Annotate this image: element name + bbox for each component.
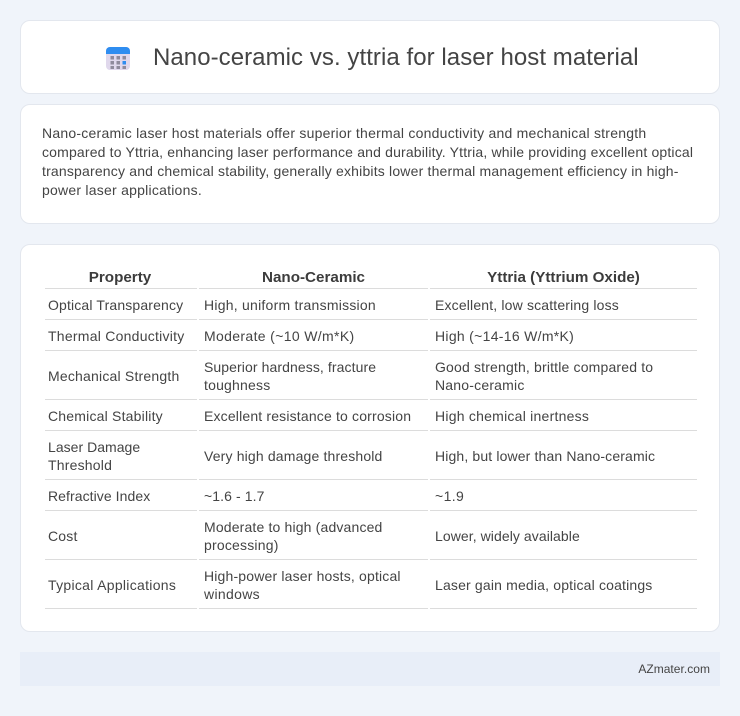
table header: Property [89,269,151,286]
table rows: ~1.9 [435,488,464,504]
summary text: Nano-ceramic laser host materials offer superior thermal conductivity and mechanical strength [42,125,646,141]
title: Nano-ceramic vs. yttria for laser host material [153,44,639,71]
table rows: Cost [48,528,78,544]
table rows: toughness [204,377,270,393]
table rows: processing) [204,537,279,553]
table rows: High (~14-16 W/m*K) [435,328,574,344]
summary text: power laser applications. [42,182,202,198]
footer bar [20,652,720,686]
table rows: High-power laser hosts, optical [204,568,401,584]
table rows: Moderate to high (advanced [204,519,382,535]
table rows: Moderate (~10 W/m*K) [204,328,355,344]
table rows: Lower, widely available [435,528,580,544]
table rows: ~1.6 - 1.7 [204,488,265,504]
table rows: Thermal Conductivity [48,328,184,344]
summary text: compared to Yttria, enhancing laser performance and durability. Yttria, while providing excellent optical [42,144,693,160]
icon: calendar [106,47,130,70]
table rows: Optical Transparency [48,297,183,313]
table rows: Superior hardness, fracture [204,359,376,375]
panel: summary [20,104,720,224]
summary text: transparency and chemical stability, generally exhibits lower thermal management efficiency in high- [42,163,679,179]
table rows: Laser Damage [48,439,140,455]
table rows: Excellent, low scattering loss [435,297,619,313]
table rows: Good strength, brittle compared to [435,359,653,375]
summary text [42,125,693,198]
table rows [45,288,697,609]
table rows: Chemical Stability [48,408,163,424]
table rows: Mechanical Strength [48,368,179,384]
table rows: Threshold [48,457,112,473]
title card [20,20,720,94]
table rows: Nano-ceramic [435,377,525,393]
table rows: Typical Applications [48,577,176,593]
table rows: Excellent resistance to corrosion [204,408,411,424]
table header: Yttria (Yttrium Oxide) [487,269,640,286]
table rows: windows [204,586,260,602]
table rows: Laser gain media, optical coatings [435,577,652,593]
table header [89,269,640,286]
table rows: High, but lower than Nano-ceramic [435,448,655,464]
table header: Nano-Ceramic [262,269,365,286]
footer credit: AZmater.com [638,662,710,676]
table rows: High, uniform transmission [204,297,376,313]
panel: comparison table [20,244,720,632]
table rows: Very high damage threshold [204,448,382,464]
table rows: Refractive Index [48,488,150,504]
table rows: High chemical inertness [435,408,589,424]
